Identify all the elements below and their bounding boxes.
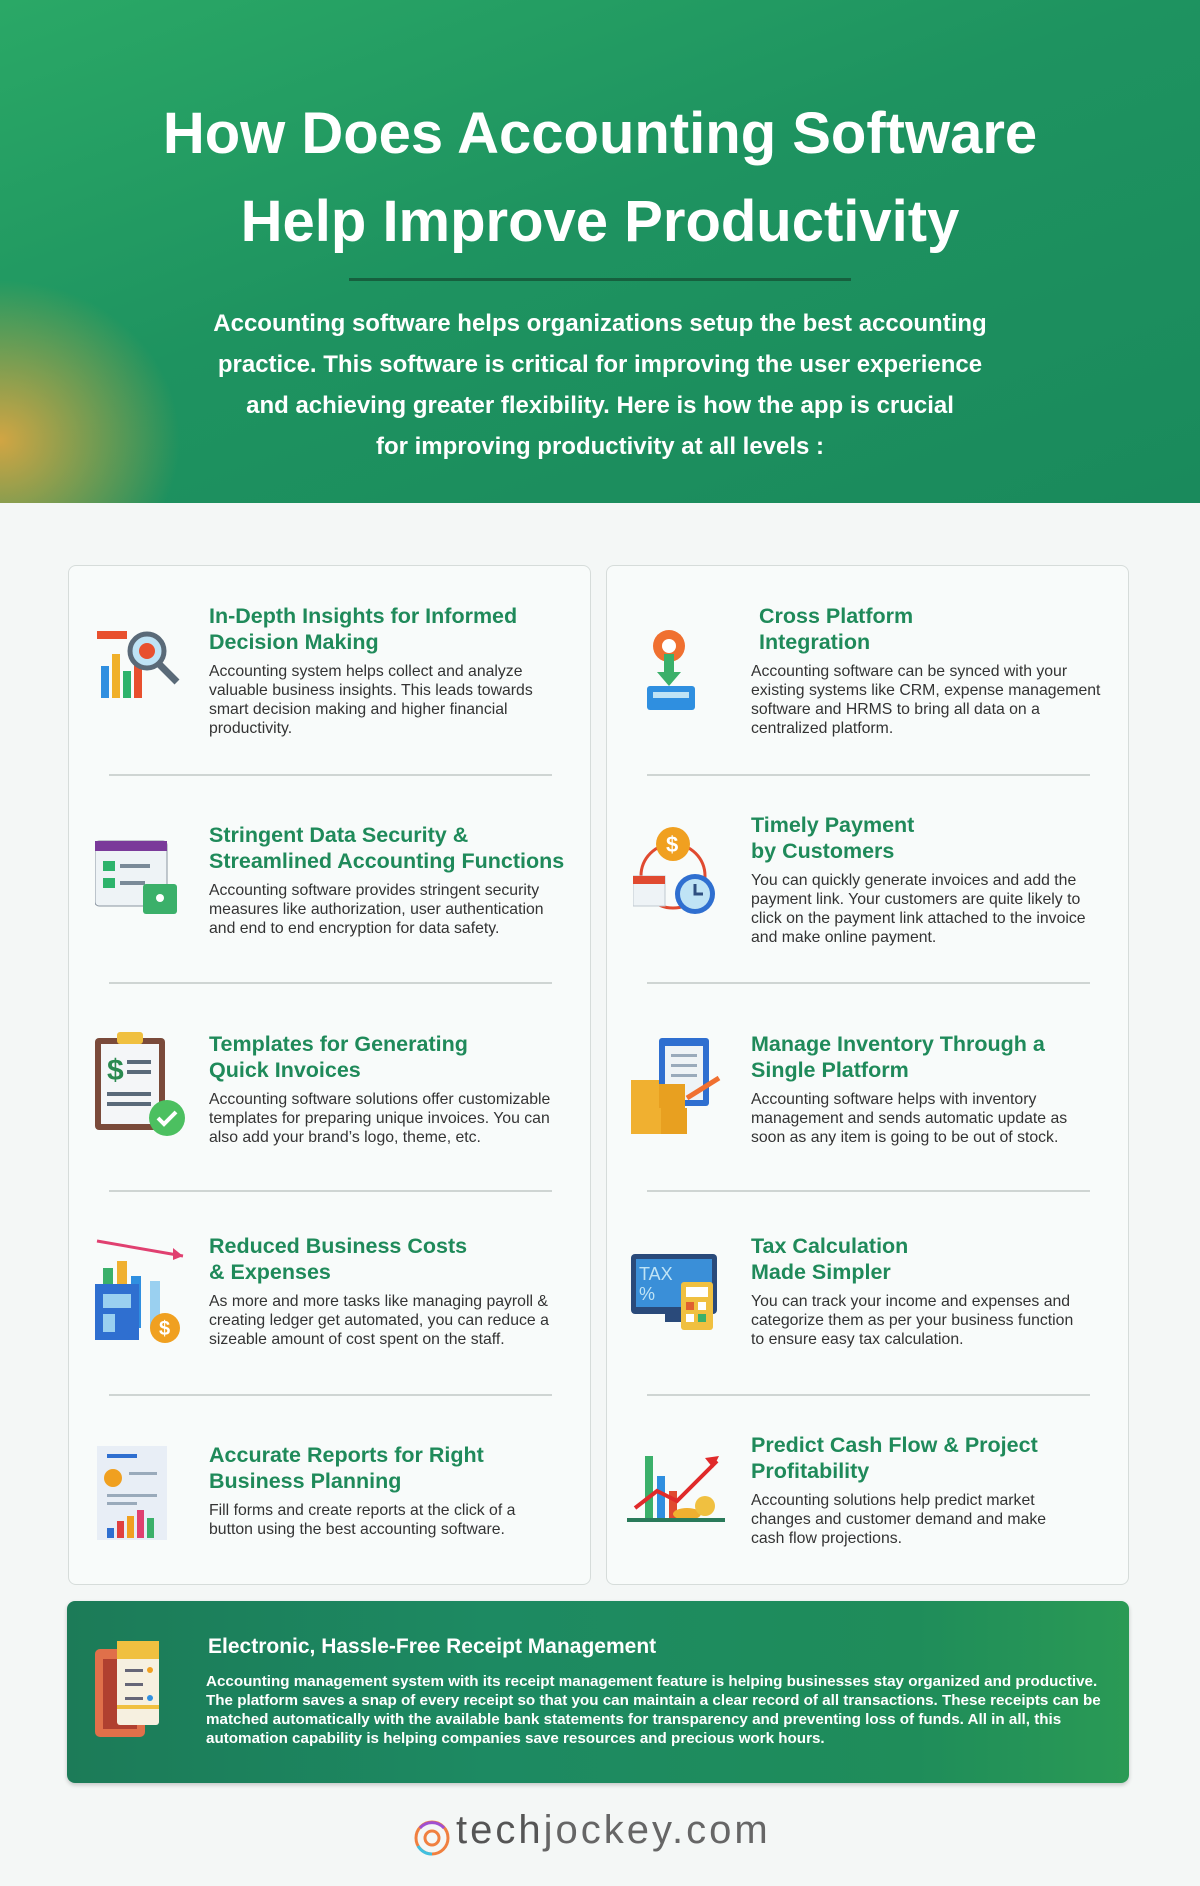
item: timely payment: payment link. Your customers are quite likely to bbox=[751, 891, 1080, 908]
item: tax: categorize them as per your business function bbox=[751, 1312, 1073, 1329]
item: templates: templates for preparing unique invoices. You can bbox=[209, 1110, 550, 1127]
item: templates: Quick Invoices bbox=[209, 1058, 361, 1082]
icon: receipt bbox=[95, 1641, 159, 1737]
item: data security bbox=[209, 823, 564, 937]
icon: report bbox=[97, 1446, 167, 1540]
item: tax: You can track your income and expenses and bbox=[751, 1293, 1070, 1310]
icon: growth chart bbox=[627, 1456, 725, 1522]
item: inventory: Single Platform bbox=[751, 1058, 909, 1082]
icon: payment clock bbox=[633, 827, 715, 914]
banner heading: Electronic, Hassle-Free Receipt Management bbox=[208, 1635, 656, 1658]
item: costs: & Expenses bbox=[209, 1260, 331, 1284]
icon: cost chart: $ bbox=[159, 1318, 170, 1340]
item: insights: smart decision making and higher financial bbox=[209, 701, 508, 718]
intro text: practice. This software is critical for improving the user experience bbox=[218, 351, 982, 378]
title bbox=[163, 101, 1037, 254]
item: templates bbox=[209, 1032, 550, 1146]
icon: gear server bbox=[647, 630, 695, 710]
item: reports: Accurate Reports for Right bbox=[209, 1443, 484, 1467]
item: reports: Fill forms and create reports at the click of a bbox=[209, 1502, 515, 1519]
logo: techjockey: techjockey.com bbox=[456, 1808, 771, 1852]
title: Help Improve Productivity bbox=[241, 189, 959, 254]
item: cross platform: software and HRMS to bring all data on a bbox=[751, 701, 1040, 718]
item: tax: Made Simpler bbox=[751, 1260, 891, 1284]
item: timely payment: You can quickly generate invoices and add the bbox=[751, 872, 1076, 889]
item: cross platform: Integration bbox=[759, 630, 870, 654]
item: inventory: Accounting software helps with inventory bbox=[751, 1091, 1036, 1108]
item: cross platform: existing systems like CRM, expense management bbox=[751, 682, 1100, 699]
item: templates: also add your brand’s logo, theme, etc. bbox=[209, 1129, 481, 1146]
item: tax: to ensure easy tax calculation. bbox=[751, 1331, 964, 1348]
header background bbox=[0, 0, 1200, 503]
item: insights: Accounting system helps collect and analyze bbox=[209, 663, 522, 680]
item: insights: valuable business insights. This leads towards bbox=[209, 682, 533, 699]
icon: inventory bbox=[631, 1038, 720, 1134]
item: timely payment: click on the payment link attached to the invoice bbox=[751, 910, 1086, 927]
item: costs: sizeable amount of cost spent on the staff. bbox=[209, 1331, 505, 1348]
icon: invoice bbox=[95, 1032, 185, 1136]
item: insights: Decision Making bbox=[209, 630, 379, 654]
item: costs: creating ledger get automated, you can reduce a bbox=[209, 1312, 549, 1329]
item: timely payment bbox=[751, 813, 1086, 946]
item: cash flow: Accounting solutions help predict market bbox=[751, 1492, 1035, 1509]
panel: right bbox=[606, 565, 1129, 1585]
item: insights: In-Depth Insights for Informed bbox=[209, 604, 517, 628]
item: inventory: Manage Inventory Through a bbox=[751, 1032, 1045, 1056]
item: timely payment: by Customers bbox=[751, 839, 894, 863]
title: How Does Accounting Software bbox=[163, 101, 1037, 166]
banner text bbox=[206, 1673, 1101, 1747]
banner text: matched automatically with the available bank statements for transparency and preventing loss of funds. All in all, this bbox=[206, 1711, 1061, 1728]
item: cash flow bbox=[751, 1433, 1046, 1547]
banner: receipt management bbox=[67, 1601, 1129, 1783]
item: cross platform: Accounting software can be synced with your bbox=[751, 663, 1067, 680]
item: cash flow: changes and customer demand and make bbox=[751, 1511, 1046, 1528]
icon: tax monitor: TAX bbox=[639, 1264, 673, 1284]
item: inventory: management and sends automatic update as bbox=[751, 1110, 1067, 1127]
banner text: The platform saves a snap of every receipt so that you can maintain a clear record of all transactions. These receipts can be bbox=[206, 1692, 1101, 1709]
icon: payment clock: $ bbox=[666, 832, 678, 857]
item: cash flow: Profitability bbox=[751, 1459, 869, 1483]
item: reports bbox=[209, 1443, 516, 1538]
item: reports: button using the best accounting software. bbox=[209, 1521, 505, 1538]
item: data security: Streamlined Accounting Functions bbox=[209, 849, 564, 873]
item: data security: measures like authorization, user authentication bbox=[209, 901, 544, 918]
item: cross platform: centralized platform. bbox=[751, 720, 893, 737]
icon: tax monitor bbox=[631, 1254, 717, 1330]
item: insights bbox=[209, 604, 533, 737]
intro text bbox=[213, 310, 987, 460]
item: templates: Accounting software solutions offer customizable bbox=[209, 1091, 550, 1108]
icon: secure window bbox=[95, 840, 177, 914]
item: reports: Business Planning bbox=[209, 1469, 401, 1493]
item: costs: Reduced Business Costs bbox=[209, 1234, 467, 1258]
item: tax bbox=[751, 1234, 1073, 1348]
item: data security: and end to end encryption for data safety. bbox=[209, 920, 499, 937]
item: cross platform bbox=[751, 604, 1100, 737]
intro text: for improving productivity at all levels : bbox=[376, 433, 824, 460]
item: costs bbox=[209, 1234, 549, 1348]
banner text: Accounting management system with its receipt management feature is helping businesses stay organized and productive. bbox=[206, 1673, 1097, 1690]
banner text: automation capability is helping companies save resources and precious work hours. bbox=[206, 1730, 825, 1747]
item: insights: productivity. bbox=[209, 720, 292, 737]
icon: tax monitor: % bbox=[639, 1284, 655, 1304]
item: cash flow: cash flow projections. bbox=[751, 1530, 902, 1547]
intro text: and achieving greater flexibility. Here is how the app is crucial bbox=[246, 392, 954, 419]
item: templates: Templates for Generating bbox=[209, 1032, 468, 1056]
item: data security: Accounting software provides stringent security bbox=[209, 882, 539, 899]
item: timely payment: and make online payment. bbox=[751, 929, 936, 946]
item: costs: As more and more tasks like managing payroll & bbox=[209, 1293, 548, 1310]
item: tax: Tax Calculation bbox=[751, 1234, 908, 1258]
icon: invoice: $ bbox=[107, 1054, 124, 1087]
item: inventory bbox=[751, 1032, 1067, 1146]
title underline bbox=[349, 278, 851, 281]
intro text: Accounting software helps organizations setup the best accounting bbox=[213, 310, 987, 337]
item: inventory: soon as any item is going to be out of stock. bbox=[751, 1129, 1058, 1146]
item: cross platform: Cross Platform bbox=[759, 604, 913, 628]
icon: cost chart bbox=[95, 1240, 184, 1343]
panel: left bbox=[68, 565, 591, 1585]
item: timely payment: Timely Payment bbox=[751, 813, 914, 837]
item: data security: Stringent Data Security & bbox=[209, 823, 468, 847]
icon: chart magnifier bbox=[97, 631, 180, 698]
item: cash flow: Predict Cash Flow & Project bbox=[751, 1433, 1038, 1457]
